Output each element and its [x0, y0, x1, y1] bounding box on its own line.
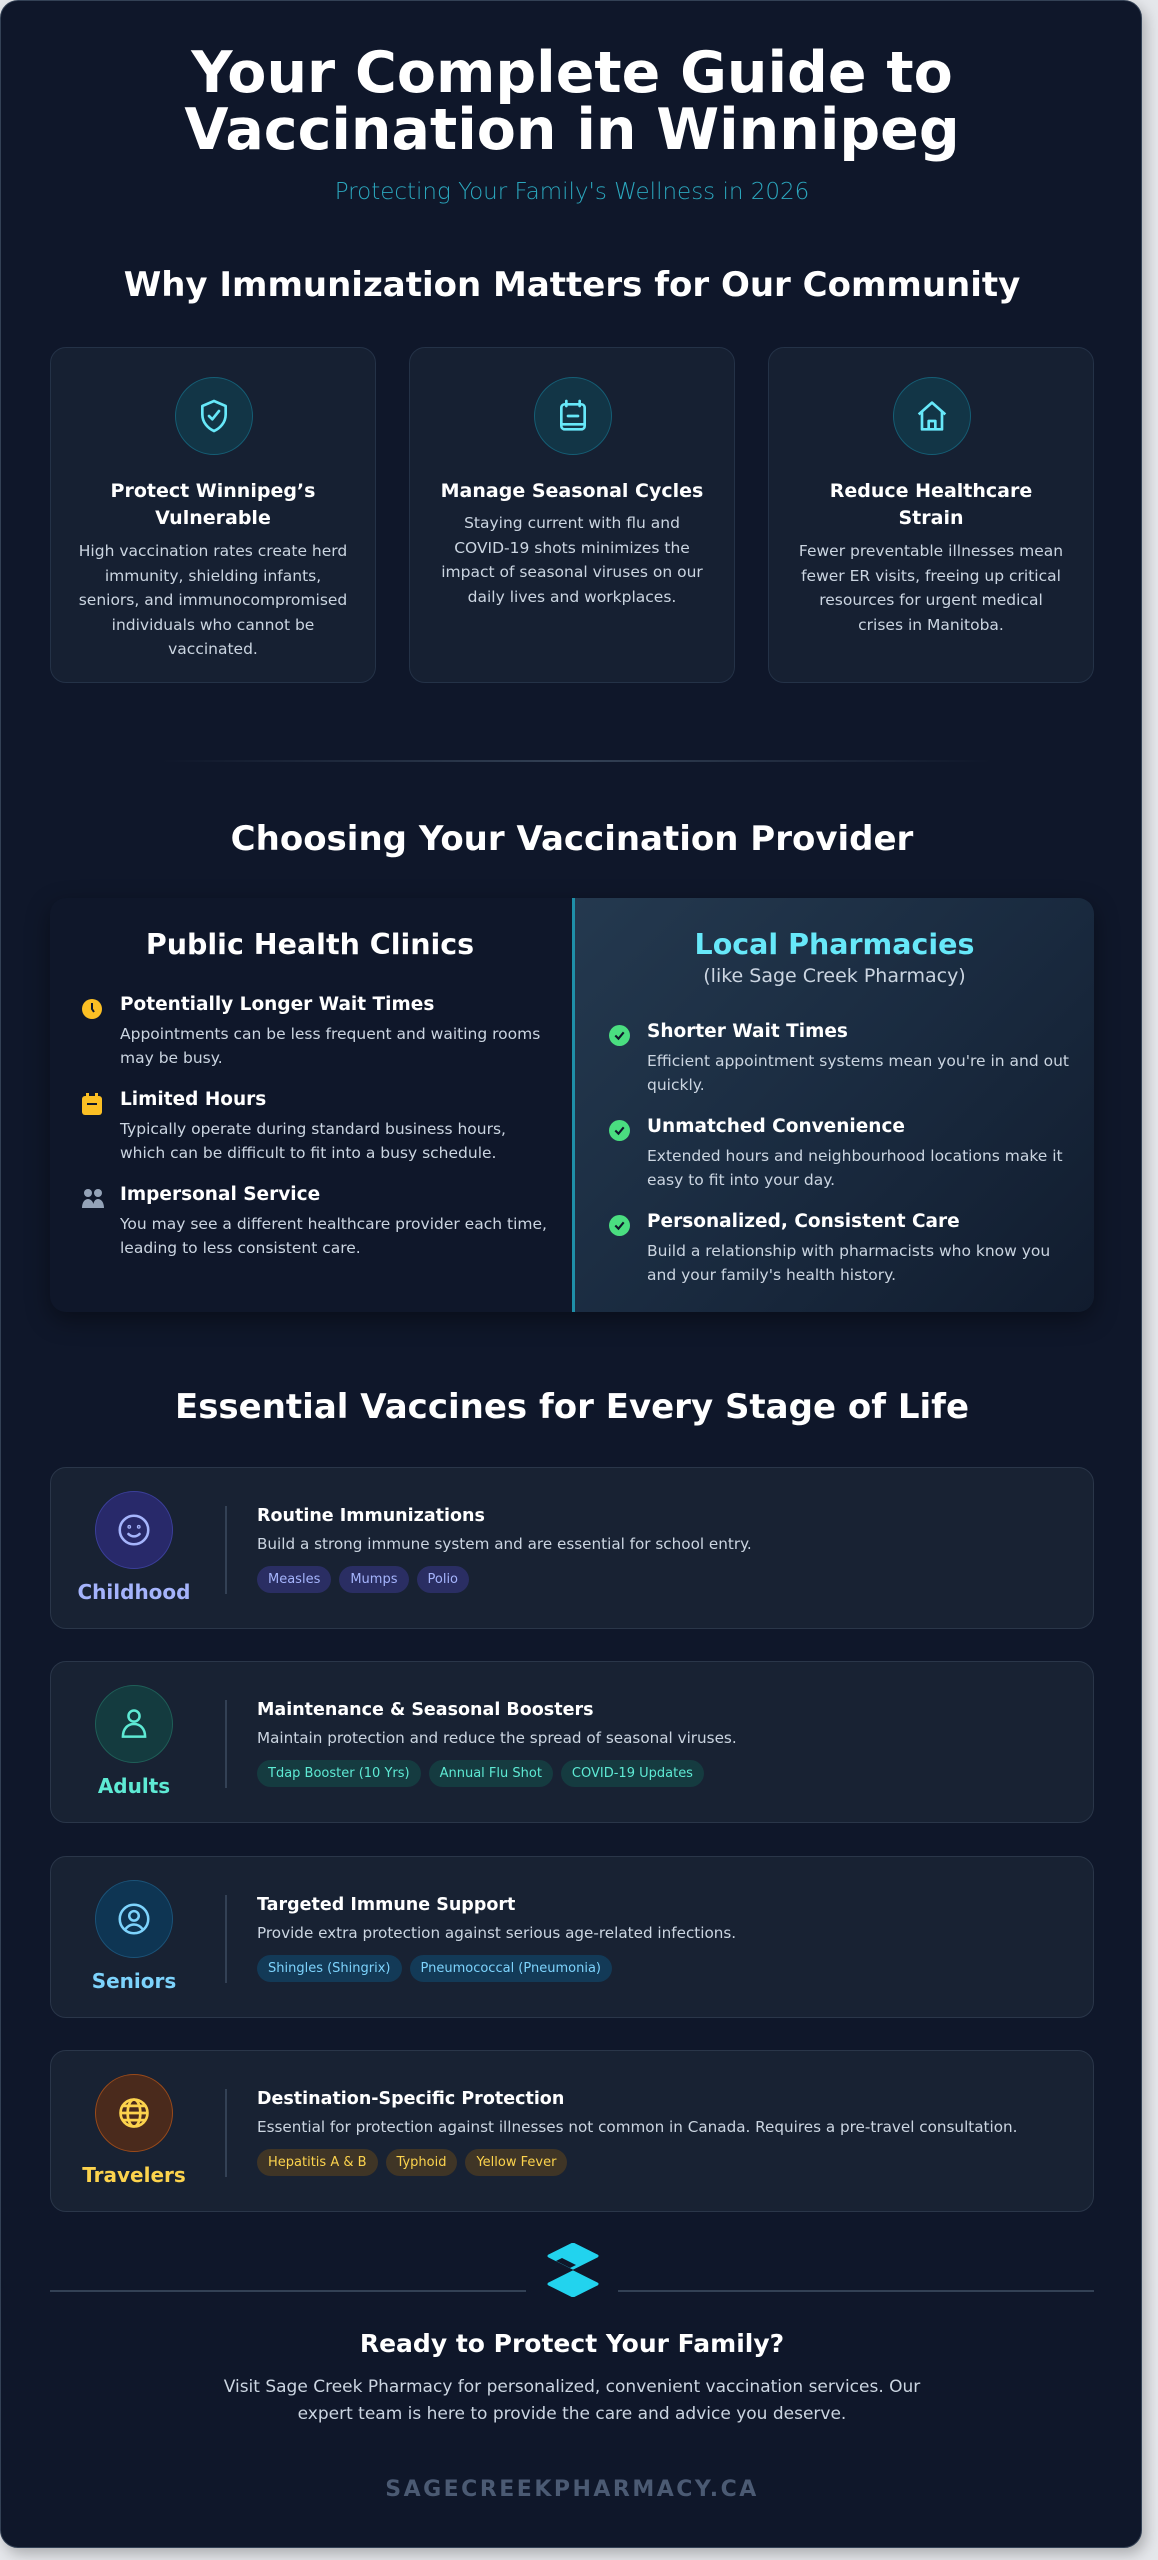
icon: clock [82, 999, 102, 1019]
title: Your Complete Guide to [191, 40, 953, 106]
card text: seniors, and immunocompromised [79, 591, 347, 609]
tags: COVID-19 Updates [572, 1766, 693, 1781]
card text: resources for urgent medical [819, 591, 1043, 609]
title: Routine Immunizations [257, 1506, 485, 1526]
website: SAGECREEKPHARMACY.CA [385, 2477, 759, 2502]
card title [111, 480, 315, 529]
item: impersonal: leading to less consistent care. [120, 1239, 361, 1257]
item: impersonal: Impersonal Service [120, 1184, 320, 1205]
tags: Mumps [350, 1572, 398, 1587]
card title [830, 480, 1032, 529]
item: convenience [609, 1116, 1063, 1189]
card text: Fewer preventable illnesses mean [799, 542, 1063, 560]
description: Maintain protection and reduce the spread of seasonal viruses. [257, 1729, 737, 1747]
tags: Typhoid [397, 2155, 446, 2170]
tags: Hepatitis A & B [268, 2155, 367, 2170]
tags: Yellow Fever [476, 2155, 556, 2170]
icon: calendar [534, 377, 612, 455]
card text: immunity, shielding infants, [105, 566, 321, 584]
card text: impact of seasonal viruses on our [441, 563, 703, 581]
tags [257, 1760, 704, 1787]
tags [257, 1566, 469, 1593]
card: protect vulnerable [50, 347, 376, 683]
heading: essential vaccines: Essential Vaccines for Every Stage of Life [175, 1387, 969, 1427]
title: Destination-Specific Protection [257, 2089, 564, 2109]
item: limited hours [82, 1089, 506, 1162]
description: Provide extra protection against serious age-related infections. [257, 1924, 736, 1942]
label: Adults [98, 1774, 170, 1798]
heading: Public Health Clinics [146, 928, 474, 961]
vaccine card: seniors [50, 1856, 1094, 2018]
item: limited hours: Limited Hours [120, 1089, 266, 1110]
title: Vaccination in Winnipeg [184, 97, 960, 163]
vaccine card: travelers [50, 2050, 1094, 2212]
card text: High vaccination rates create herd [79, 542, 347, 560]
item: limited hours: which can be difficult to fit into a busy schedule. [120, 1144, 496, 1162]
subheading: (like Sage Creek Pharmacy) [703, 965, 966, 987]
heading: choosing provider: Choosing Your Vaccination Provider [231, 819, 913, 859]
icon: person [95, 1685, 173, 1763]
tags: Shingles (Shingrix) [268, 1961, 390, 1976]
heading: why immunization: Why Immunization Matters for Our Community [124, 265, 1020, 305]
card text: daily lives and workplaces. [468, 588, 676, 606]
item: shorter wait: Shorter Wait Times [647, 1021, 848, 1042]
icon: check [609, 1025, 630, 1046]
cta heading: Ready to Protect Your Family? [360, 2329, 784, 2358]
card text: COVID-19 shots minimizes the [454, 538, 690, 556]
item: personalized [609, 1211, 1050, 1284]
tags: Annual Flu Shot [440, 1766, 542, 1781]
panel: public health clinics [82, 928, 547, 1257]
tags: Pneumococcal (Pneumonia) [420, 1961, 601, 1976]
icon: check [609, 1120, 630, 1141]
card title: Reduce Healthcare [830, 480, 1032, 502]
card title: Manage Seasonal Cycles [441, 480, 703, 502]
item: wait times: Appointments can be less frequent and waiting rooms [120, 1025, 540, 1043]
comparison panel [50, 898, 1094, 1312]
item: wait times: may be busy. [120, 1049, 223, 1067]
item: impersonal: You may see a different healthcare provider each time, [120, 1215, 547, 1233]
item: shorter wait: Efficient appointment systems mean you're in and out [647, 1052, 1069, 1070]
icon: check [609, 1215, 630, 1236]
card text: vaccinated. [168, 640, 258, 658]
tags: Measles [268, 1572, 320, 1587]
card text: Staying current with flu and [464, 514, 680, 532]
item: impersonal [82, 1184, 547, 1257]
card title: Strain [898, 507, 964, 529]
card text [79, 542, 347, 658]
icon: user circle [95, 1880, 173, 1958]
label: Seniors [92, 1969, 176, 1993]
item: shorter wait: quickly. [647, 1076, 705, 1094]
tags [257, 1955, 612, 1982]
heading: Local Pharmacies [695, 928, 974, 961]
icon: calendar [82, 1093, 102, 1115]
vaccine card: childhood [50, 1467, 1094, 1629]
item: personalized: and your family's health history. [647, 1266, 896, 1284]
item: wait times: Potentially Longer Wait Times [120, 994, 434, 1015]
label: Childhood [78, 1580, 190, 1604]
subtitle: Protecting Your Family's Wellness in 2026 [335, 179, 809, 205]
icon: people [82, 1189, 104, 1208]
tags: Polio [428, 1572, 458, 1587]
logo [547, 2243, 599, 2297]
item: shorter wait [609, 1021, 1069, 1094]
item: limited hours: Typically operate during standard business hours, [120, 1120, 506, 1138]
title: Maintenance & Seasonal Boosters [257, 1700, 594, 1720]
icon: globe [95, 2074, 173, 2152]
item: personalized: Personalized, Consistent Care [647, 1211, 960, 1232]
vaccine card: adults [50, 1661, 1094, 1823]
card text: fewer ER visits, freeing up critical [801, 566, 1061, 584]
description: Build a strong immune system and are essential for school entry. [257, 1535, 752, 1553]
panel: local pharmacies [572, 898, 1094, 1312]
icon: shield [175, 377, 253, 455]
card title: Vulnerable [155, 507, 271, 529]
description: Essential for protection against illnesses not common in Canada. Requires a pre-travel consultation. [257, 2118, 1017, 2136]
card text: individuals who cannot be [112, 616, 314, 634]
item: convenience: Unmatched Convenience [647, 1116, 905, 1137]
cta text: Visit Sage Creek Pharmacy for personalized, convenient vaccination services. Our expert team is here to provide the care and advice you deserve. [224, 2377, 920, 2424]
item: convenience: Extended hours and neighbourhood locations make it [647, 1147, 1063, 1165]
card text: crises in Manitoba. [858, 616, 1004, 634]
card text [441, 514, 703, 606]
title [184, 40, 960, 163]
title: Targeted Immune Support [257, 1895, 515, 1915]
icon: smiley [95, 1491, 173, 1569]
item: personalized: Build a relationship with pharmacists who know you [647, 1242, 1050, 1260]
tags [257, 2149, 567, 2176]
card title: Protect Winnipeg’s [111, 480, 315, 502]
card: healthcare strain [768, 347, 1094, 683]
card: seasonal cycles [409, 347, 735, 683]
icon: house [893, 377, 971, 455]
card text [799, 542, 1063, 634]
tags: Tdap Booster (10 Yrs) [268, 1766, 410, 1781]
label: Travelers [82, 2163, 186, 2187]
item: wait times [82, 994, 540, 1067]
item: convenience: easy to fit into your day. [647, 1171, 835, 1189]
